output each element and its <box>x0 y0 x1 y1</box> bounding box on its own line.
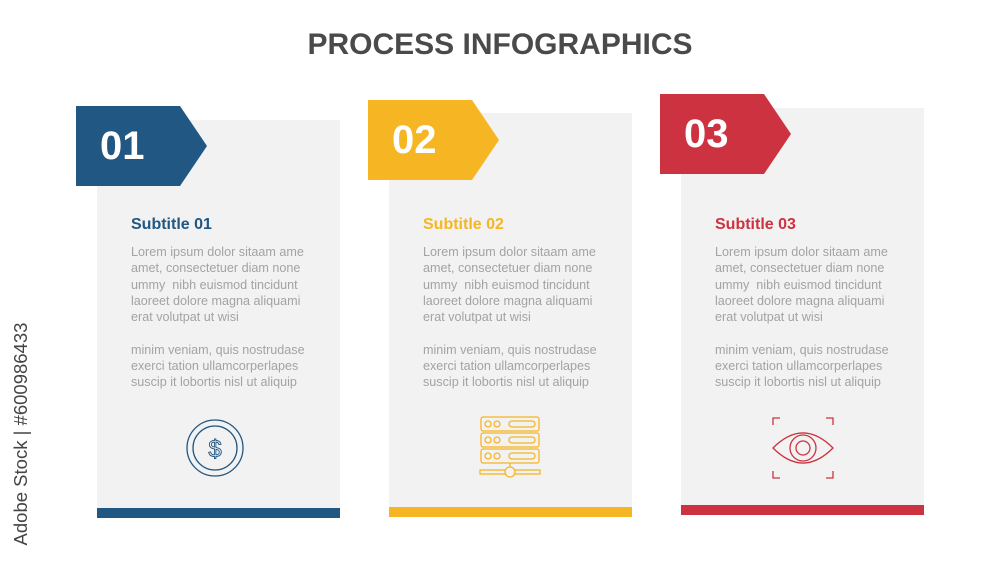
body text 02: amet, consectetuer diam none <box>423 261 592 275</box>
badge 02 <box>368 100 499 180</box>
subtitle 01: Subtitle 01 <box>131 216 212 233</box>
body text 03: suscip it lobortis nisl ut aliquip <box>715 375 881 389</box>
badge 01 <box>76 106 207 186</box>
icon: dollar coin: $ <box>208 436 222 463</box>
body text 03 <box>715 245 889 389</box>
body text 01: suscip it lobortis nisl ut aliquip <box>131 375 297 389</box>
body text 01: minim veniam, quis nostrudase <box>131 343 305 357</box>
body text 02: laoreet dolore magna aliquami <box>423 294 592 308</box>
icon: eye <box>772 417 834 479</box>
body text 02: ummy nibh euismod tincidunt <box>423 278 590 292</box>
body text 03: ummy nibh euismod tincidunt <box>715 278 882 292</box>
bottom bar 02 <box>389 507 632 517</box>
body text 02: minim veniam, quis nostrudase <box>423 343 597 357</box>
body text 02 <box>423 245 597 389</box>
body text 02: exerci tation ullamcorperlapes <box>423 359 590 373</box>
panel: step 02 <box>389 113 632 517</box>
body text 01: exerci tation ullamcorperlapes <box>131 359 298 373</box>
body text 01: Lorem ipsum dolor sitaam ame <box>131 245 304 259</box>
body text 01 <box>131 245 305 389</box>
body text 01: amet, consectetuer diam none <box>131 261 300 275</box>
bottom bar 01 <box>97 508 340 518</box>
body text 03: erat volutpat ut wisi <box>715 310 823 324</box>
icon: server <box>479 416 541 478</box>
panel: step 01 <box>97 120 340 518</box>
body text 02: erat volutpat ut wisi <box>423 310 531 324</box>
subtitle 02: Subtitle 02 <box>423 216 504 233</box>
badge 02: 02 <box>392 118 436 162</box>
icon: dollar coin <box>186 419 244 477</box>
badge 01: 01 <box>100 124 144 168</box>
title: PROCESS INFOGRAPHICS <box>307 28 693 61</box>
body text 02: Lorem ipsum dolor sitaam ame <box>423 245 596 259</box>
body text 03: Lorem ipsum dolor sitaam ame <box>715 245 888 259</box>
body text 01: laoreet dolore magna aliquami <box>131 294 300 308</box>
badge 03 <box>660 94 791 174</box>
panel: step 03 <box>681 108 924 515</box>
badge 03: 03 <box>684 112 728 156</box>
subtitle 03: Subtitle 03 <box>715 216 796 233</box>
body text 03: minim veniam, quis nostrudase <box>715 343 889 357</box>
body text 01: ummy nibh euismod tincidunt <box>131 278 298 292</box>
body text 02: suscip it lobortis nisl ut aliquip <box>423 375 589 389</box>
watermark side text: Adobe Stock | #600986433 <box>10 323 31 545</box>
body text 01: erat volutpat ut wisi <box>131 310 239 324</box>
body text 03: amet, consectetuer diam none <box>715 261 884 275</box>
body text 03: exerci tation ullamcorperlapes <box>715 359 882 373</box>
body text 03: laoreet dolore magna aliquami <box>715 294 884 308</box>
bottom bar 03 <box>681 505 924 515</box>
